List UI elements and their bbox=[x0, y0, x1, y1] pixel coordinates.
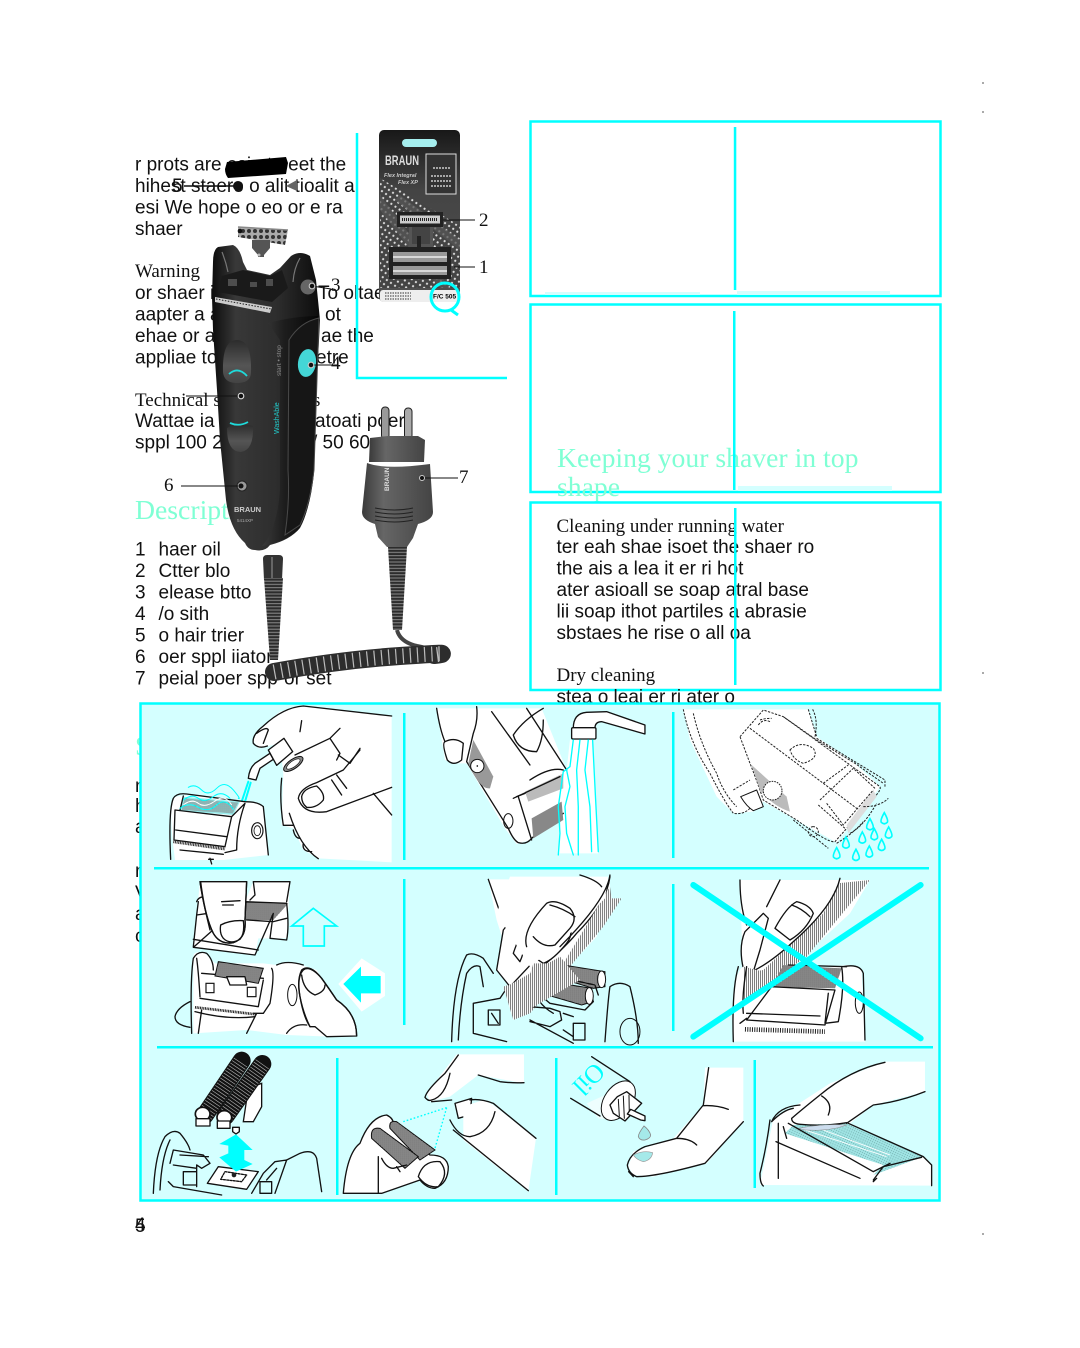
text block: intro paragraph: r prots are esie to eet the bbox=[135, 154, 346, 176]
callouts for package numbers bbox=[443, 210, 488, 278]
text block: warning: appliae to a bbox=[135, 348, 234, 368]
panel: illustrated cleaning steps bbox=[140, 704, 940, 1200]
text block: warning: Warning bbox=[135, 261, 200, 282]
text under panel: left margin fragments: n bbox=[135, 776, 146, 797]
number 6: 6 bbox=[164, 475, 174, 496]
number 1: 1 bbox=[479, 257, 488, 278]
text under panel: left margin fragments: S bbox=[135, 730, 150, 761]
step: pouring soap on foil bbox=[170, 706, 392, 864]
black smudge over text bbox=[225, 157, 288, 178]
list: parts description: /o sith bbox=[158, 604, 209, 625]
number 3: 3 bbox=[331, 275, 340, 296]
step: removing foil frame bbox=[175, 882, 385, 1037]
list: parts description: o hair trier bbox=[158, 626, 245, 646]
text under panel: left margin fragments: V bbox=[135, 883, 148, 904]
text block: technical specifications: Technical specification bbox=[135, 390, 311, 411]
page number: 4 bbox=[135, 1215, 146, 1236]
step: brushing cutter block bbox=[452, 875, 640, 1045]
number 2: 2 bbox=[479, 210, 488, 231]
heading: keeping your shaver in top shape: shape bbox=[557, 471, 620, 502]
step: shaking water out bbox=[683, 709, 892, 860]
heading: description: Description bbox=[135, 494, 264, 525]
list: parts description: 3 bbox=[135, 582, 146, 604]
icon: on/off switch bbox=[296, 348, 318, 378]
panel: middle right frame with section heading bbox=[530, 304, 940, 502]
text block: cleaning under running water: ater asioall se soap atral base bbox=[556, 580, 809, 601]
step: oiling cutter block bbox=[343, 1054, 536, 1193]
illustration: shaver body: BRAUN bbox=[234, 505, 261, 514]
step: lifting cutter block bbox=[153, 1061, 322, 1195]
illustration: shaver body bbox=[212, 245, 320, 550]
icon: prohibited cross bbox=[693, 885, 921, 1038]
list: parts description bbox=[135, 540, 332, 690]
list: parts description: haer oil bbox=[158, 540, 221, 560]
list: parts description: 1 bbox=[135, 540, 146, 560]
text block: cleaning under running water: Cleaning under running water bbox=[556, 516, 785, 537]
illustration: shaver body: start • stop bbox=[276, 345, 283, 376]
text block: technical specifications: s bbox=[313, 390, 320, 411]
text block: warning: ot bbox=[325, 304, 342, 326]
list: parts description: Ctter blo bbox=[158, 561, 230, 582]
text block: warning: or shaer is bbox=[135, 283, 224, 304]
text under panel: left margin fragments: a bbox=[135, 817, 146, 838]
text under panel: left margin fragments: c bbox=[135, 926, 144, 947]
illustration: plug and coiled cord bbox=[263, 407, 468, 672]
callout lines and numbers bbox=[164, 176, 341, 496]
text block: intro paragraph: hihest staero o alit tioalit a bbox=[135, 176, 355, 197]
text block: technical specifications: Wattae ia a bbox=[135, 411, 231, 432]
icon: release button bbox=[300, 280, 316, 294]
list: parts description: 4 bbox=[135, 604, 146, 625]
page number: 5 bbox=[135, 1216, 146, 1237]
text under panel: left margin fragments: n bbox=[135, 861, 146, 882]
text block: dry cleaning: Dry cleaning bbox=[556, 665, 656, 686]
list: parts description: or set bbox=[284, 668, 332, 690]
text block: cleaning under running water: sbstaes he rise o all oa bbox=[556, 623, 751, 644]
step: rinsing under tap bbox=[437, 707, 645, 855]
heading: keeping your shaver in top shape: Keeping your shaver in top bbox=[557, 442, 858, 473]
panel: top right empty frame bbox=[530, 122, 940, 296]
illustration: shaver body: 5414XP bbox=[237, 518, 253, 523]
text block: cleaning under running water: lii soap ithot partiles a abrasie bbox=[556, 602, 807, 622]
text block: technical specifications: atoati poer bbox=[315, 411, 405, 432]
number 5 callout: 5 bbox=[172, 176, 183, 197]
text block: dry cleaning: stea o leai er ri ater o bbox=[556, 687, 735, 708]
list: parts description: peial poer spp bbox=[158, 668, 278, 690]
panel: cleaning instructions text bbox=[530, 502, 940, 708]
text under panel: left margin fragments: h bbox=[135, 796, 146, 817]
list: parts description: 6 bbox=[135, 647, 146, 668]
list: parts description: oer sppl iiator bbox=[158, 647, 273, 668]
text block: warning: To oltae bbox=[318, 283, 385, 304]
step: applying oil to foil bbox=[760, 1062, 932, 1186]
label: Oil on tube: Oil bbox=[567, 1057, 611, 1101]
text block: intro paragraph: shaer bbox=[135, 219, 183, 240]
illustration: replacement part package F/C 505: BRAUN bbox=[385, 152, 419, 168]
illustration: replacement part package F/C 505: Flex XP bbox=[398, 180, 418, 186]
text block: warning: ae the bbox=[321, 326, 374, 347]
text block: warning: etre bbox=[316, 348, 349, 368]
illustration: cutter block bbox=[238, 227, 288, 257]
step: do not brush foil bbox=[693, 878, 921, 1042]
text block: technical specifications: sppl 100 240 / bbox=[135, 432, 255, 454]
number 7 with line: 7 bbox=[459, 467, 468, 488]
icon: cyan magnifier bbox=[431, 283, 459, 315]
text block: cleaning under running water: the ais a lea it er ri hot bbox=[556, 558, 744, 580]
illustration: replacement part package F/C 505 bbox=[379, 130, 460, 302]
text block: technical specifications: / 50 60 bbox=[312, 432, 370, 454]
list: parts description: 5 bbox=[135, 626, 146, 646]
text block: warning: ehae or a at bbox=[135, 326, 237, 347]
registration marks bbox=[982, 83, 984, 1234]
number 4: 4 bbox=[331, 353, 341, 374]
illustration: replacement part package F/C 505: Flex Integral bbox=[384, 173, 417, 179]
text block: cleaning under running water: ter eah shae isoet the shaer ro bbox=[556, 537, 814, 558]
list: parts description: 2 bbox=[135, 561, 146, 582]
list: parts description: 7 bbox=[135, 668, 146, 690]
text block: warning: aapter a a lo bbox=[135, 304, 241, 326]
list: parts description: elease btto bbox=[158, 582, 251, 604]
text under panel: left margin fragments: a bbox=[135, 904, 146, 925]
frame: replacement part inset lines bbox=[357, 133, 507, 378]
text under panel: left margin fragments bbox=[135, 730, 150, 947]
illustration: replacement part package F/C 505: F/C 505 bbox=[433, 294, 457, 300]
text block: intro paragraph: esi We hope o eo or e ra bbox=[135, 198, 343, 218]
illustration: shaver body: WashAble bbox=[274, 402, 281, 434]
illustration: plug and coiled cord: BRAUN bbox=[384, 467, 391, 491]
step: drop of oil on finger bbox=[567, 1057, 743, 1177]
